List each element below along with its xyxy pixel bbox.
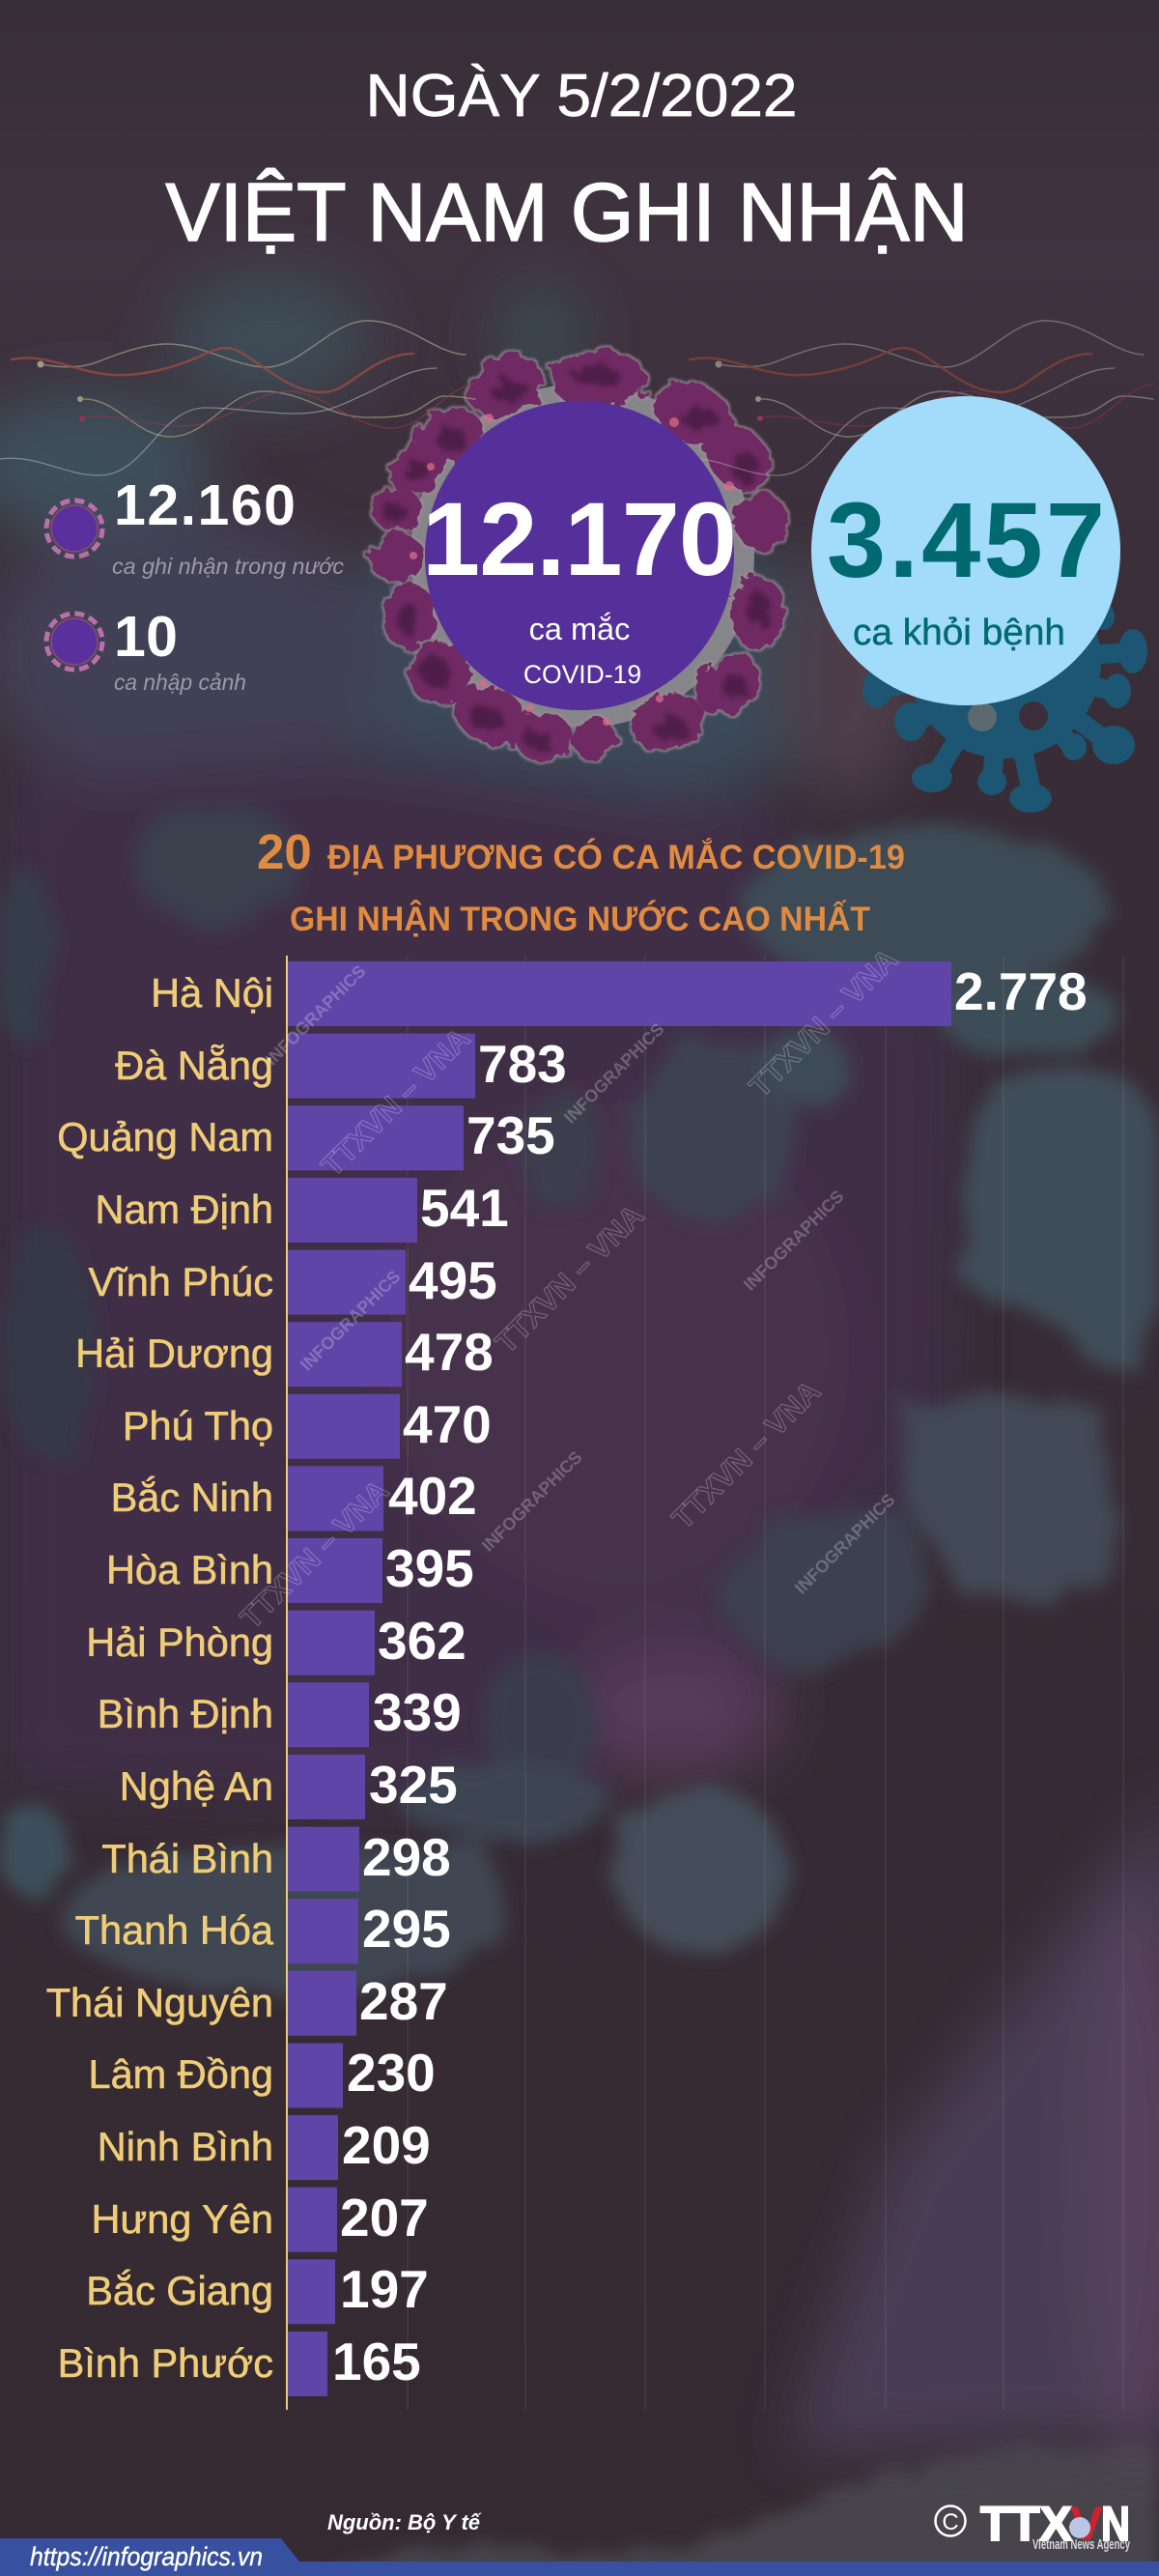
row: Phú Thọ: 470 (403, 1394, 492, 1454)
footer bar and url tab: https://infographics.vn (30, 2542, 263, 2571)
watermarks: INFOGRAPHICS (791, 1490, 899, 1598)
row: Vĩnh Phúc: Vĩnh Phúc (89, 1259, 273, 1304)
row: Nghệ An (120, 1755, 458, 1819)
row: Bắc Ninh (111, 1466, 477, 1531)
watermarks: INFOGRAPHICS (478, 1447, 586, 1556)
row: Nghệ An: Nghệ An (120, 1763, 273, 1809)
watermarks: INFOGRAPHICS (740, 1187, 848, 1295)
watermarks: TTXVN – VNA (315, 1021, 476, 1183)
logo: TTXVN (935, 2497, 1130, 2553)
row: Hà Nội (151, 961, 1088, 1026)
row: Thái Nguyên: Thái Nguyên (46, 1980, 273, 2025)
row: Quảng Nam: 735 (466, 1105, 555, 1165)
row: Nam Định: 541 (420, 1178, 509, 1238)
row: Hải Dương (75, 1322, 494, 1387)
panel: total cases circle: ca mắc (529, 611, 630, 646)
row: Ninh Bình: 209 (342, 2115, 431, 2175)
logo: TTXVN: N (1101, 2497, 1130, 2551)
row: Hà Nội: Hà Nội (151, 970, 273, 1016)
watermarks: TTXVN – VNA (234, 1474, 395, 1635)
row: Hòa Bình: Hòa Bình (106, 1547, 273, 1592)
bar chart (46, 956, 1123, 2410)
panel: recovered circle: 3.457 (827, 481, 1105, 600)
logo: TTXVN: V (1070, 2497, 1104, 2551)
row: Thái Bình (101, 1827, 451, 1892)
title: date: NGÀY 5/2/2022 (365, 63, 798, 129)
row: Hải Phòng (86, 1611, 466, 1675)
icon: small virus, domestic cases (46, 501, 102, 557)
row: Hải Phòng: 362 (378, 1611, 466, 1671)
row: Phú Thọ (123, 1394, 492, 1459)
row: Thái Bình: Thái Bình (101, 1836, 273, 1881)
row: Hưng Yên (91, 2188, 429, 2252)
row: Nam Định (95, 1178, 509, 1243)
row: Bình Phước: Bình Phước (58, 2340, 273, 2386)
panel: total cases circle: COVID-19 (523, 660, 641, 689)
row: Thái Nguyên (46, 1971, 448, 2036)
row: Hải Dương: Hải Dương (75, 1331, 273, 1376)
panel: total cases circle (422, 401, 737, 710)
watermarks: TTXVN – VNA (665, 1374, 827, 1535)
watermarks: INFOGRAPHICS (262, 961, 370, 1070)
footer bar and url tab (0, 2538, 1159, 2576)
watermarks (234, 942, 904, 1635)
watermarks: INFOGRAPHICS (560, 1019, 668, 1128)
row: Bắc Giang (86, 2259, 429, 2324)
row: Thanh Hóa: Thanh Hóa (75, 1907, 274, 1953)
icon: small virus, imported cases (46, 614, 102, 670)
row: Bắc Giang: Bắc Giang (86, 2268, 273, 2313)
row: Vĩnh Phúc (89, 1250, 497, 1314)
row: Hòa Bình (106, 1538, 474, 1603)
watermarks: TTXVN – VNA (489, 1198, 650, 1360)
row: Hải Dương: 478 (405, 1322, 494, 1382)
chart heading: 20 (257, 824, 312, 879)
logo: TTXVN: C (942, 2509, 959, 2535)
row: Đà Nẵng: Đà Nẵng (115, 1043, 273, 1088)
row: Bình Định: 339 (373, 1682, 462, 1742)
row: Lâm Đồng (89, 2043, 436, 2108)
row: Lâm Đồng: 230 (347, 2043, 436, 2103)
logo: TTXVN: TTX (980, 2497, 1072, 2551)
row: Bình Định: Bình Định (98, 1691, 273, 1736)
row: Bình Phước: 165 (332, 2332, 421, 2391)
row: Thanh Hóa: 295 (362, 1899, 451, 1959)
wavy lines: left and right (0, 321, 1154, 475)
row: Thanh Hóa (75, 1899, 451, 1963)
illustration: central coronavirus (370, 343, 797, 761)
row: Thái Nguyên: 287 (359, 1971, 448, 2031)
row: Hòa Bình: 395 (385, 1538, 474, 1598)
row: Hưng Yên: Hưng Yên (91, 2196, 273, 2242)
row: Hà Nội: 2.778 (954, 961, 1088, 1021)
row: Quảng Nam: Quảng Nam (57, 1114, 273, 1159)
row: Quảng Nam (57, 1105, 555, 1170)
watermarks: TTXVN – VNA (743, 942, 904, 1103)
row: Bắc Giang: 197 (340, 2259, 429, 2319)
source: Nguồn: Bộ Y tế (327, 2510, 483, 2534)
label: domestic cases: ca ghi nhận trong nước (112, 554, 344, 579)
label: imported cases: ca nhập cảnh (114, 670, 246, 695)
row: Thái Bình: 298 (362, 1827, 451, 1887)
row: Lâm Đồng: Lâm Đồng (89, 2051, 273, 2097)
row: Hải Phòng: Hải Phòng (86, 1619, 273, 1665)
row: Bình Định (98, 1682, 462, 1747)
row: Ninh Bình: Ninh Bình (98, 2124, 273, 2169)
watermarks: INFOGRAPHICS (297, 1267, 405, 1375)
title: Việt Nam ghi nhận: VIỆT NAM GHI NHẬN (166, 167, 968, 259)
panel: recovered circle (811, 396, 1120, 705)
row: Đà Nẵng (115, 1034, 567, 1099)
panel: total cases circle: 12.170 (422, 480, 737, 597)
row: Phú Thọ: Phú Thọ (123, 1403, 273, 1448)
stat: 10: 10 (114, 605, 178, 669)
chart heading: GHI NHẬN TRONG NƯỚC CAO NHẤT (290, 900, 870, 938)
stat: 12.160: 12.160 (114, 473, 296, 537)
row: Ninh Bình (98, 2115, 431, 2180)
row: Bắc Ninh: 402 (388, 1466, 477, 1526)
icon: blue virus (862, 565, 1147, 813)
row: Vĩnh Phúc: 495 (409, 1250, 497, 1310)
chart heading (257, 824, 905, 938)
row: Nghệ An: 325 (369, 1755, 458, 1815)
row: Bắc Ninh: Bắc Ninh (111, 1474, 273, 1520)
row: Hưng Yên: 207 (340, 2188, 429, 2247)
chart heading: ĐỊA PHƯƠNG CÓ CA MẮC COVID-19 (327, 838, 905, 876)
panel: recovered circle: ca khỏi bệnh (853, 613, 1065, 653)
row: Bình Phước (58, 2332, 421, 2396)
row: Đà Nẵng: 783 (478, 1034, 567, 1094)
row: Nam Định: Nam Định (95, 1187, 273, 1232)
